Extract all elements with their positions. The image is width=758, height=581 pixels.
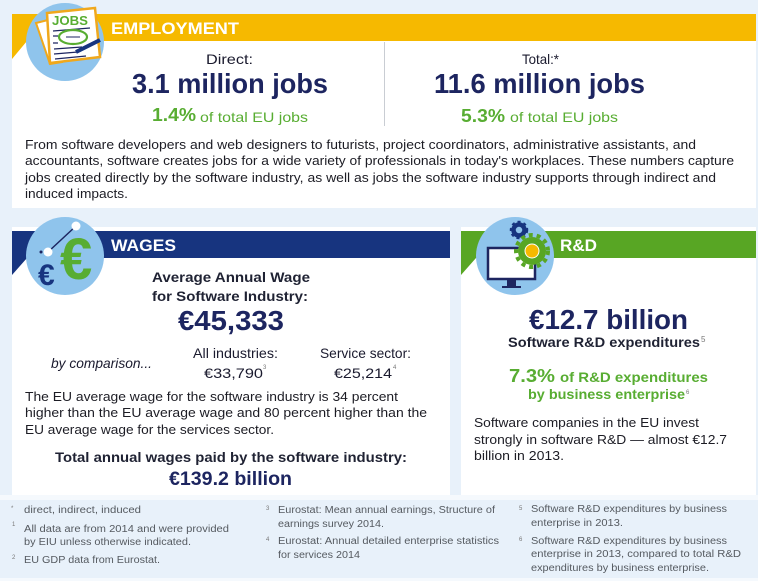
total annual wages stat: Total annual wages paid by the software industry:: [55, 449, 407, 465]
footnotes column 3: Software R&D expenditures by business: [531, 536, 727, 547]
direct jobs stat: 1.4%: [152, 105, 196, 125]
footnotes column 3: expenditures by business enterprise.: [531, 563, 709, 574]
service sector wage: 4: [393, 365, 397, 371]
wages description: The EU average wage for the software industry is 34 percent: [25, 389, 398, 404]
employment description: jobs created directly by the software industry, as well as jobs the software industry supports through indirect and: [24, 170, 716, 185]
wages description: [25, 389, 427, 437]
footnotes column 2: 3: [266, 506, 270, 512]
footnotes column 1: direct, indirect, induced: [24, 505, 141, 516]
R&D header band: [461, 231, 756, 275]
employment header band: [12, 14, 756, 59]
footnotes column 1: EU GDP data from Eurostat.: [24, 555, 160, 566]
service sector wage: [320, 345, 411, 381]
footnotes column 2: earnings survey 2014.: [278, 519, 384, 530]
employment description: [24, 137, 734, 201]
icon: jobs newspaper: JOBS: [52, 13, 88, 28]
total annual wages stat: €139.2 billion: [169, 469, 292, 490]
average annual wage stat: €45,333: [178, 305, 284, 336]
employment description: From software developers and web designers to futurists, project coordinators, administrative assistants, and: [25, 137, 696, 152]
footnotes column 3: Software R&D expenditures by business: [531, 504, 727, 515]
comparison label: by comparison...: [51, 355, 152, 371]
icon: euro coins: €: [60, 227, 92, 292]
wages heading: WAGES: [111, 236, 176, 255]
all industries wage: [193, 345, 278, 381]
footnotes column 2: Eurostat: Mean annual earnings, Structure of: [278, 505, 495, 516]
direct jobs stat: Direct:: [206, 51, 253, 67]
direct jobs stat: [132, 51, 328, 125]
footnotes column 2: Eurostat: Annual detailed enterprise statistics: [278, 536, 499, 547]
R&D share stat: of R&D expenditures: [560, 369, 708, 385]
icon: euro coins: [26, 217, 104, 295]
total jobs stat: of total EU jobs: [510, 109, 618, 125]
footnotes column 3: enterprise in 2013, compared to total R&D: [531, 549, 741, 560]
footnotes column 3: [519, 504, 741, 574]
panel: R&D: [461, 217, 756, 495]
employment description: accountants, software creates jobs for a wide variety of professionals in today's workplaces. These numbers capture: [25, 153, 734, 168]
footnotes column 1: All data are from 2014 and were provided: [24, 524, 229, 535]
R&D expenditure stat: Software R&D expenditures: [508, 334, 700, 350]
wages header band: [12, 231, 450, 275]
R&D description: Software companies in the EU invest: [474, 415, 699, 430]
icon: jobs newspaper: [26, 3, 104, 81]
all industries wage: All industries:: [193, 345, 278, 361]
R&D share stat: 6: [686, 390, 690, 396]
icon: euro coins: €: [38, 259, 55, 292]
average annual wage stat: Average Annual Wage: [152, 269, 310, 285]
footnotes column 2: [266, 505, 499, 561]
total annual wages stat: [55, 449, 407, 490]
footnotes column 2: for services 2014: [278, 550, 360, 561]
total jobs stat: 11.6 million jobs: [434, 68, 645, 99]
footnotes column 3: 6: [519, 537, 523, 543]
R&D expenditure stat: €12.7 billion: [529, 304, 688, 335]
wages description: EU average wage for the services sector.: [25, 422, 274, 437]
all industries wage: 3: [263, 365, 267, 371]
icon: monitor and gears: [476, 217, 554, 295]
employment description: induced impacts.: [25, 186, 128, 201]
R&D description: [474, 415, 727, 463]
R&D heading: R&D: [560, 236, 597, 255]
R&D share stat: [509, 366, 708, 402]
total jobs stat: 5.3%: [461, 106, 505, 126]
average annual wage stat: [152, 269, 310, 336]
footnotes column 1: 2: [12, 555, 16, 561]
footnotes column 1: 1: [12, 522, 16, 528]
R&D expenditure stat: [508, 304, 706, 350]
panel: employment: [12, 3, 756, 208]
footnotes column 1: [11, 505, 229, 566]
R&D share stat: by business enterprise: [528, 386, 685, 402]
average annual wage stat: for Software Industry:: [152, 288, 308, 304]
footnotes column 2: 4: [266, 537, 270, 543]
wages description: higher than the EU average wage and 80 percent higher than the: [25, 405, 427, 420]
footnotes column 3: enterprise in 2013.: [531, 518, 623, 529]
employment heading: EMPLOYMENT: [111, 19, 240, 38]
service sector wage: Service sector:: [320, 345, 411, 361]
total jobs stat: [434, 51, 645, 126]
R&D expenditure stat: 5: [701, 335, 706, 344]
panel: wages: [12, 217, 450, 495]
all industries wage: €33,790: [204, 365, 263, 381]
total jobs stat: Total:*: [522, 51, 560, 67]
footnotes column 1: by EIU unless otherwise indicated.: [24, 537, 191, 548]
service sector wage: €25,214: [334, 365, 392, 381]
footnotes column 1: *: [11, 506, 14, 512]
footnotes: [0, 495, 758, 581]
R&D description: strongly in software R&D — almost €12.7: [474, 432, 727, 447]
R&D description: billion in 2013.: [474, 448, 564, 463]
R&D share stat: 7.3%: [509, 366, 555, 386]
footnotes column 3: 5: [519, 506, 523, 512]
direct jobs stat: of total EU jobs: [200, 109, 308, 125]
direct jobs stat: 3.1 million jobs: [132, 68, 328, 99]
